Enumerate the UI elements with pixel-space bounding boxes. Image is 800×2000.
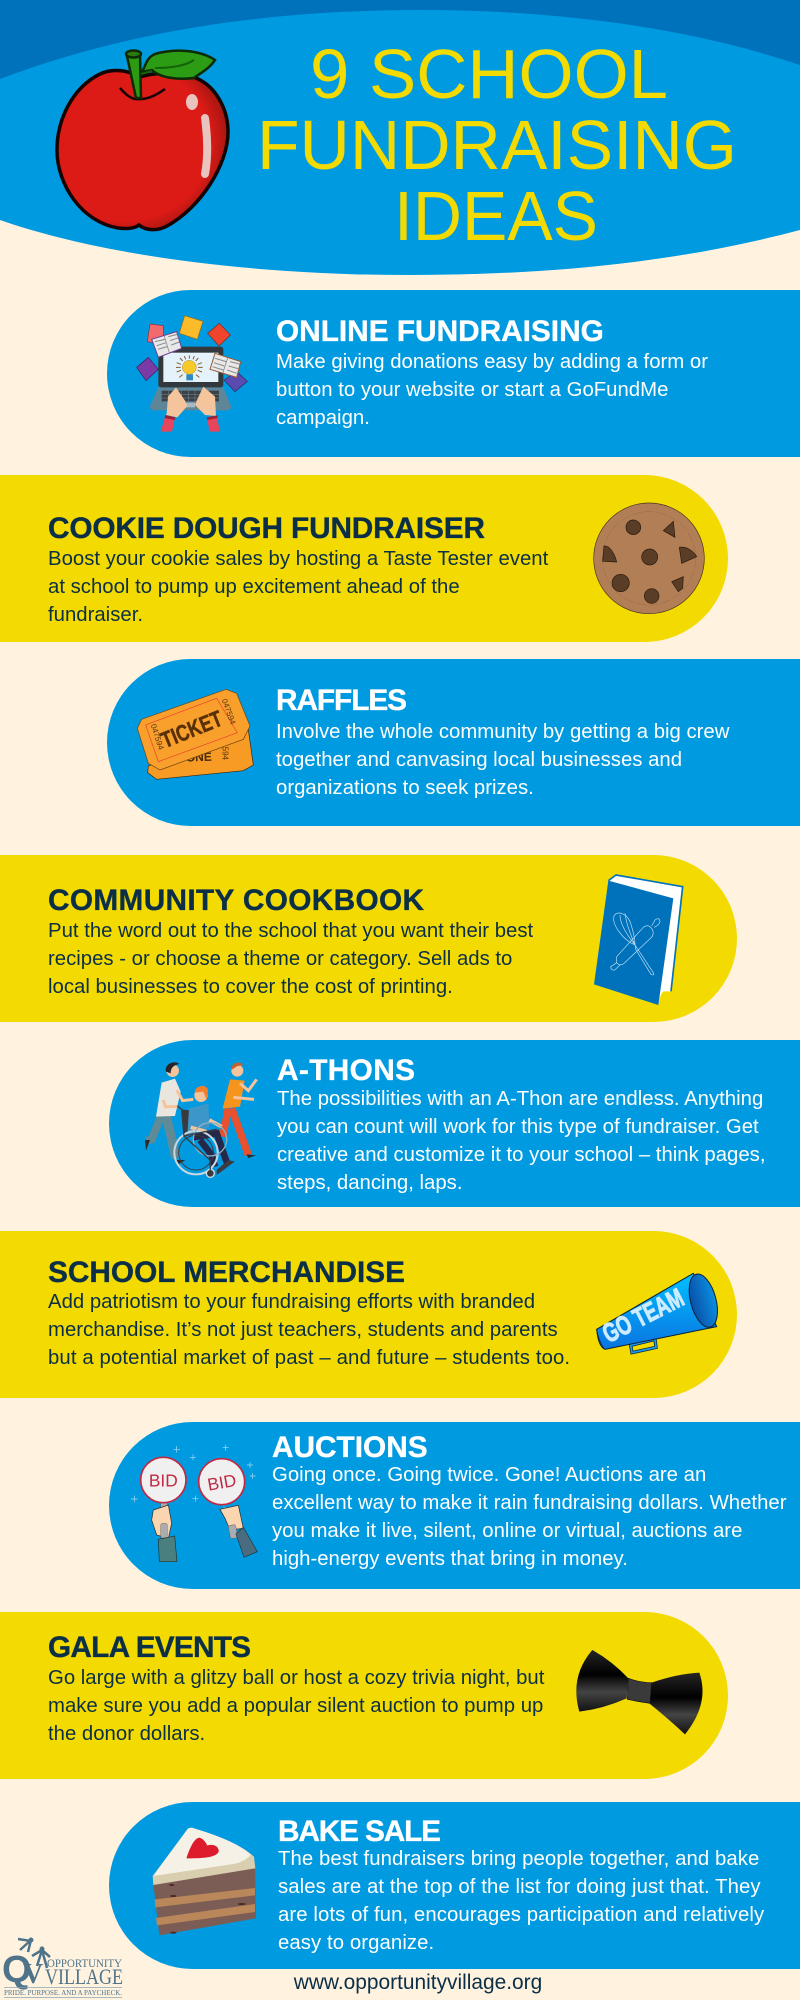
heading: GALA EVENTS [48,1631,251,1664]
logo: Opportunity Village: VILLAGE [45,1964,123,1989]
icon: raffle tickets [137,689,253,779]
heading: COOKIE DOUGH FUNDRAISER [48,512,485,545]
icon: cookie [594,503,704,614]
body text: together and canvasing local businesses and [276,749,682,771]
heading: AUCTIONS [272,1431,428,1464]
body text: are lots of fun, encourages participation and relatively [278,1904,765,1926]
body text: Make giving donations easy by adding a form or [276,351,708,373]
panel: online fundraising [107,290,800,457]
icon: laptop with books and hands [137,316,247,432]
body text: local businesses to cover the cost of printing. [48,976,453,998]
body text: Going once. Going twice. Gone! Auctions are an [272,1464,706,1486]
body text: you can count will work for this type of fundraiser. Get [277,1116,759,1138]
icon: bid paddles: BID [206,1470,238,1495]
heading: SCHOOL MERCHANDISE [48,1256,405,1289]
body text: recipes - or choose a theme or category. Sell ads to [48,948,512,970]
website url: www.opportunityvillage.org [293,1971,542,1994]
icon: megaphone: GO TEAM [597,1282,689,1348]
body text: but a potential market of past – and future – students too. [48,1347,570,1369]
heading: RAFFLES [276,684,407,717]
body text: you make it live, silent, online or virtual, auctions are [272,1520,742,1542]
panel: auctions [109,1422,800,1589]
title: FUNDRAISING [257,106,737,184]
icon: bid paddles [131,1445,257,1562]
body text: fundraiser. [48,604,143,626]
logo: Opportunity Village [2,1938,123,1998]
panel: raffles [107,659,800,826]
icon: cake slice [153,1828,256,1935]
header banner [0,0,800,275]
body text: high-energy events that bring in money. [272,1548,628,1570]
title [257,35,737,255]
heading: BAKE SALE [278,1815,441,1848]
icon: bow tie [576,1650,703,1734]
icon: apple [57,50,228,230]
body text: Go large with a glitzy ball or host a cozy trivia night, but [48,1667,545,1689]
body text: Put the word out to the school that you want their best [48,920,533,942]
panel: community cookbook [0,855,737,1022]
logo: Opportunity Village: PRIDE. PURPOSE. AND A PAYCHECK. [4,1990,122,1997]
body text: sales are at the top of the list for doing just that. They [278,1876,761,1898]
body text: button to your website or start a GoFundMe [276,379,668,401]
body text: easy to organize. [278,1932,434,1954]
icon: raffle tickets: ONE [186,750,212,765]
title: 9 SCHOOL [310,35,668,113]
logo: Opportunity Village: Q [2,1949,32,1991]
body text: Involve the whole community by getting a big crew [276,721,730,743]
body text: at school to pump up excitement ahead of the [48,576,460,598]
panel: gala events [0,1612,728,1779]
panel: a-thons [109,1040,800,1207]
panel: cookie dough fundraiser [0,475,728,642]
body text: excellent way to make it rain fundraising dollars. Whether [272,1492,787,1514]
body text: campaign. [276,407,370,429]
icon: raffle tickets: 047594 [149,723,166,751]
body text: Boost your cookie sales by hosting a Taste Tester event [48,548,549,570]
body text: steps, dancing, laps. [277,1172,462,1194]
body text: Add patriotism to your fundraising efforts with branded [48,1291,535,1313]
icon: bid paddles: BID [149,1471,178,1491]
icon: raffle tickets: 047594 [220,698,238,726]
logo: Opportunity Village: OPPORTUNITY [47,1956,122,1970]
panel: school merchandise [0,1231,737,1398]
body text: The possibilities with an A-Thon are endless. Anything [277,1088,763,1110]
icon: people with wheelchair [145,1062,257,1177]
logo: Opportunity Village: V [23,1959,43,1990]
icon: raffle tickets: TICKET [158,707,227,754]
body text: creative and customize it to your school – think pages, [277,1144,766,1166]
heading: COMMUNITY COOKBOOK [48,884,424,917]
icon: raffle tickets: 594 [220,747,229,761]
heading: A-THONS [277,1054,415,1087]
body text: merchandise. It’s not just teachers, students and parents [48,1319,558,1341]
panel: bake sale [109,1802,800,1969]
body text: The best fundraisers bring people together, and bake [278,1848,759,1870]
body text: organizations to seek prizes. [276,777,534,799]
icon: megaphone [597,1271,723,1353]
body text: make sure you add a popular silent auction to pump up [48,1695,543,1717]
body text: the donor dollars. [48,1723,205,1745]
heading: ONLINE FUNDRAISING [276,315,604,348]
icon: cookbook [594,875,683,1005]
title: IDEAS [394,177,598,255]
